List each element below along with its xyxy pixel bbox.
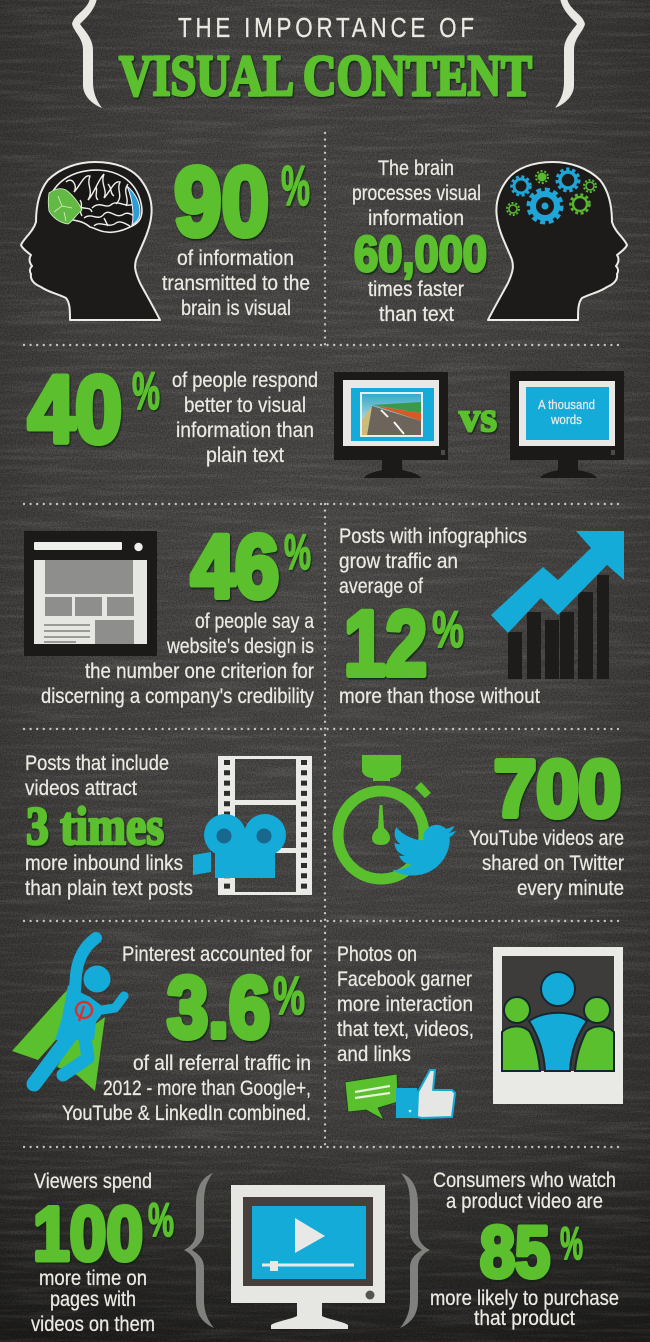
icon: stopwatch	[338, 755, 431, 879]
title line two: VISUAL CONTENT	[119, 43, 532, 108]
stat: 46%: %	[284, 524, 311, 580]
stat: 85%: 85	[480, 1213, 550, 1293]
text: 40 percent caption: of people respond	[172, 369, 318, 392]
text: 3.6 percent caption	[62, 1052, 311, 1125]
text: 700 caption: shared on Twitter	[482, 852, 624, 875]
panel: header	[72, 0, 585, 108]
text: 700 caption: every minute	[517, 877, 624, 900]
text: 46 percent caption: of people say a	[195, 610, 314, 633]
icon: polaroid of people	[493, 947, 623, 1104]
title line one: THE IMPORTANCE OF	[178, 13, 474, 44]
text: 3.6 percent caption: of all referral traffic in	[133, 1052, 311, 1075]
panel: 100 percent	[31, 1170, 174, 1336]
icon: left title brace	[72, 0, 102, 108]
panel: 46 percent	[24, 516, 314, 708]
text: 3 times lead in: videos attract	[25, 777, 137, 800]
panel: 12 percent	[339, 525, 624, 708]
stat: 700: 700	[494, 744, 621, 833]
icon: monitor with picture	[334, 372, 448, 478]
icon: monitor with words: words	[550, 412, 582, 427]
stat: 85%: %	[560, 1217, 583, 1269]
text: 85 percent caption: that product	[474, 1307, 575, 1330]
stat: 90%: %	[281, 154, 310, 218]
panel: video monitor	[184, 1173, 430, 1329]
panel: 3 times	[25, 752, 312, 900]
text: 90 percent caption: of information	[177, 247, 294, 270]
text: facebook caption: Facebook garner	[337, 968, 472, 991]
stat: 90%: 90	[174, 147, 269, 256]
text: 3 times trailing	[25, 852, 193, 900]
text: 100 percent caption: more time on	[39, 1267, 147, 1290]
chart: bars with rising arrow	[491, 531, 624, 679]
text: 700 caption: YouTube videos are	[469, 827, 624, 850]
stat: 3.6%: 3.6	[167, 960, 270, 1056]
icon: website layout	[24, 531, 157, 656]
panel: 40 percent	[28, 357, 624, 478]
stat: 12%: 12	[344, 593, 427, 695]
text: facebook caption: Photos on	[337, 943, 417, 966]
text: facebook caption: and links	[337, 1043, 411, 1066]
icon: right title brace	[555, 0, 585, 108]
text: 85 percent lead in: a product video are	[446, 1190, 603, 1213]
icon: head with brain	[21, 162, 160, 320]
panel: facebook photos	[337, 943, 623, 1120]
dividers	[24, 133, 622, 1147]
text: lead in: information	[368, 207, 464, 230]
text: 90 percent caption: transmitted to the	[162, 272, 310, 295]
text: 90 percent caption	[162, 247, 310, 320]
text: 40 percent caption: information than	[176, 419, 314, 442]
label: vs: vs	[459, 395, 497, 441]
stat: 3 times: 3 times	[26, 796, 164, 856]
stat: 100%: %	[148, 1193, 174, 1246]
icon: monitor with video player	[231, 1185, 385, 1329]
text: facebook caption: more interaction	[337, 993, 473, 1016]
panel: 85 percent	[430, 1169, 619, 1330]
panel: 3.6 percent	[12, 938, 312, 1125]
text: 12 percent trailing: more than those without	[339, 685, 540, 708]
icon: right grey brace	[400, 1173, 430, 1328]
stat: 40%: 40	[28, 357, 122, 463]
text: trailing: times faster	[368, 278, 464, 301]
icon: pinterest superhero	[12, 938, 124, 1091]
text: 3.6 percent caption: 2012 - more than Google+,	[103, 1077, 311, 1100]
text: 40 percent caption: better to visual	[184, 394, 306, 417]
text: 85 percent lead in	[433, 1169, 616, 1213]
icon: head with gears	[488, 162, 627, 320]
text: facebook caption	[337, 943, 474, 1066]
text: 40 percent caption: plain text	[206, 444, 284, 467]
text: 46 percent caption: website's design is	[166, 635, 314, 658]
text: 3 times trailing: than plain text posts	[25, 877, 193, 900]
panel: 60,000 times faster	[352, 157, 627, 326]
icon: monitor with words	[510, 371, 624, 478]
stat: 100%: 100	[33, 1192, 143, 1277]
text: 100 percent caption: pages with	[50, 1288, 136, 1311]
text: 3.6 percent caption: YouTube & LinkedIn combined.	[62, 1102, 311, 1125]
text: 46 percent caption: the number one criterion for	[85, 660, 314, 683]
panel: 700 videos	[338, 744, 624, 900]
text: 100 percent lead in: Viewers spend	[34, 1170, 152, 1193]
text: trailing: than text	[379, 303, 454, 326]
text: 90 percent caption: brain is visual	[181, 297, 291, 320]
text: 3 times lead in	[25, 752, 169, 800]
icon: chat bubble	[345, 1074, 398, 1120]
stat: 12%: %	[432, 601, 464, 659]
icon: twitter bird	[392, 825, 456, 876]
text: lead in: The brain	[378, 157, 454, 180]
text: trailing	[368, 278, 464, 326]
text: 12 percent lead in: grow traffic an	[339, 550, 458, 573]
text: 12 percent lead in: Posts with infographics	[339, 525, 527, 548]
text: 100 percent caption: videos on them	[31, 1313, 155, 1336]
stat: 60,000: 60,000	[354, 226, 487, 282]
text: facebook caption: that text, videos,	[337, 1018, 474, 1041]
panel: 90 percent	[21, 147, 310, 320]
text: 700 caption	[469, 827, 624, 900]
text: 12 percent lead in	[339, 525, 527, 598]
icon: film strip	[218, 756, 312, 895]
text: lead in: processes visual	[352, 182, 481, 205]
text: 3 times lead in: Posts that include	[25, 752, 169, 775]
stat: 46%: 46	[191, 516, 279, 616]
text: 46 percent caption: discerning a company's credibility	[41, 685, 314, 708]
text: 85 percent caption: more likely to purchase	[430, 1287, 619, 1310]
text: 46 percent caption	[41, 610, 314, 708]
text: 85 percent caption	[430, 1287, 619, 1330]
text: lead in	[352, 157, 481, 230]
text: 3.6 percent lead in: Pinterest accounted for	[122, 943, 312, 966]
icon: left grey brace	[184, 1173, 214, 1328]
stat: 3.6%: %	[273, 966, 305, 1026]
text: 85 percent lead in: Consumers who watch	[433, 1169, 616, 1192]
text: 12 percent lead in: average of	[339, 575, 423, 598]
text: 3 times trailing: more inbound links	[25, 852, 183, 875]
text: 100 percent caption	[31, 1267, 155, 1336]
icon: monitor with words: A thousand	[538, 397, 595, 412]
icon: movie camera	[193, 814, 286, 878]
icon: thumbs up	[396, 1070, 455, 1118]
text: 40 percent caption	[172, 369, 318, 467]
stat: 40%: %	[132, 362, 160, 421]
